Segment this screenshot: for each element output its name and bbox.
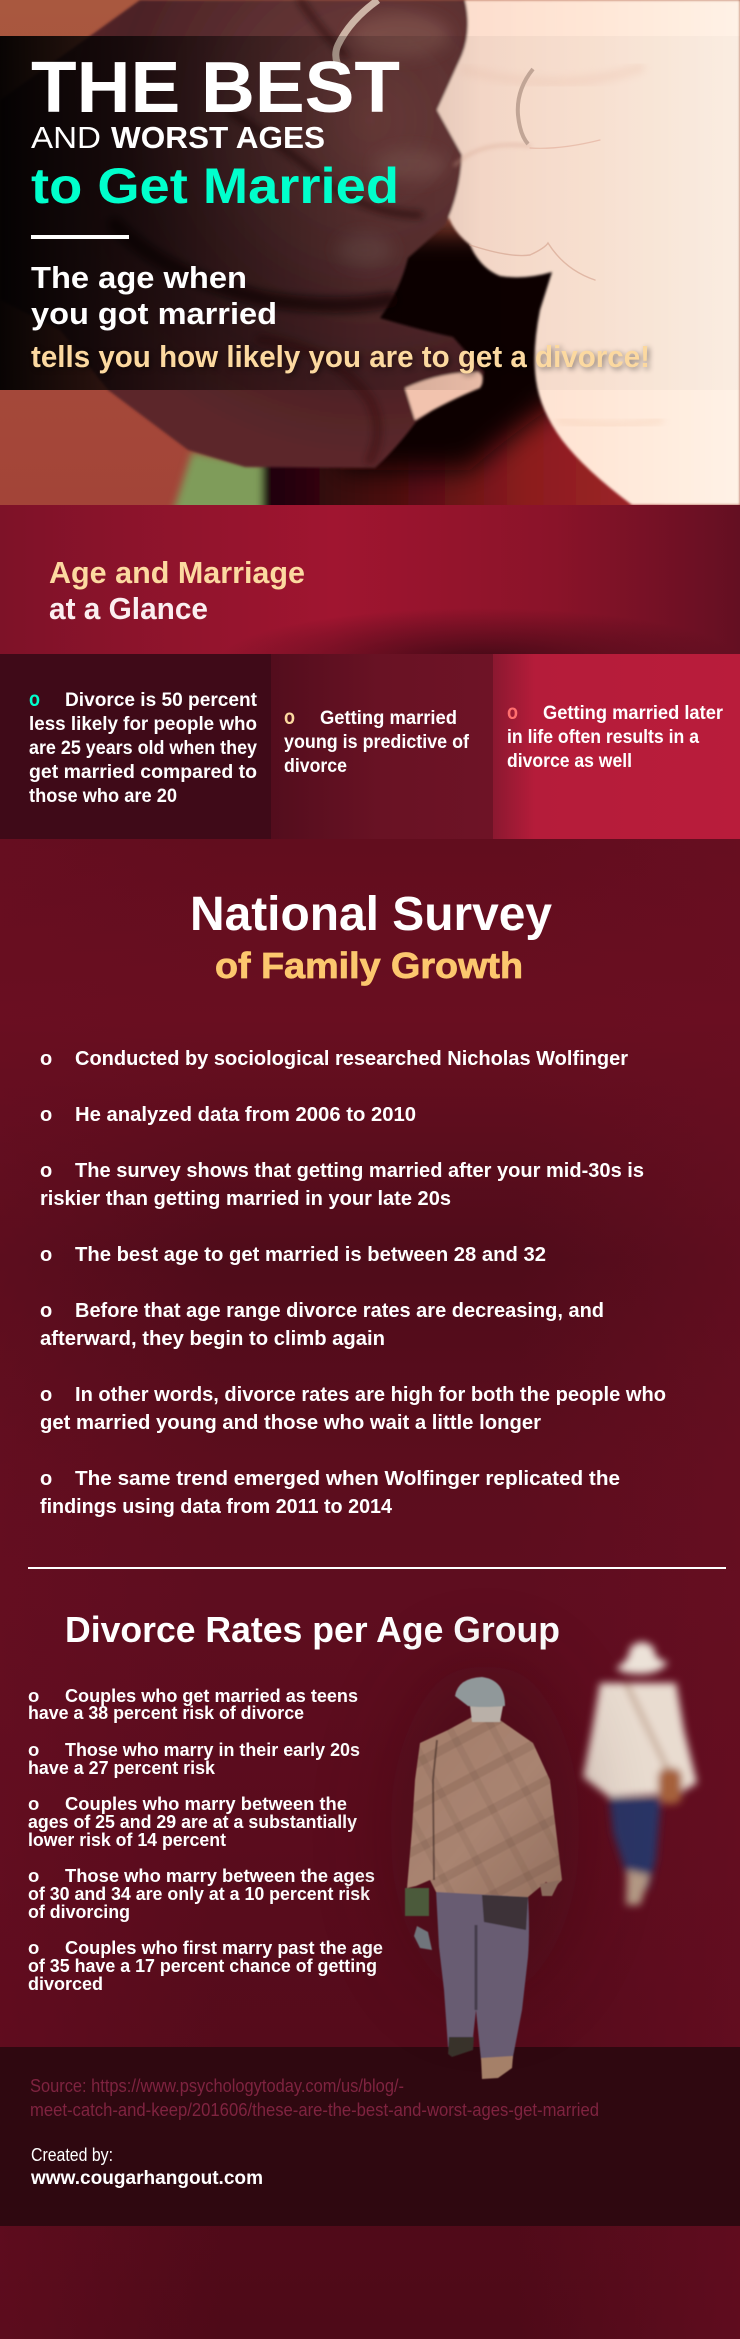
panel: divorce is 50 percent less likely: those who are 20 bbox=[29, 786, 177, 807]
panel: divorce is 50 percent less likely: are 25 years old when they bbox=[29, 738, 257, 759]
icon: pale hand ring bbox=[518, 69, 533, 144]
title: THE BEST bbox=[31, 48, 400, 128]
list: divorce rates: Couples who get married as teens bbox=[65, 1685, 358, 1706]
panel: getting married young: young is predictive of bbox=[284, 732, 470, 753]
panel: footer bbox=[0, 2047, 740, 2226]
heading: national survey bbox=[190, 888, 552, 986]
main background bbox=[0, 839, 740, 2339]
list: survey findings: In other words, divorce rates are high for both the people who bbox=[75, 1384, 666, 1406]
list: survey findings bbox=[40, 1048, 666, 1518]
panel: age and marriage header bbox=[0, 505, 740, 654]
title: to Get Married bbox=[31, 158, 399, 214]
heading: divorce rates per age group: Divorce Rates per Age Group bbox=[65, 1609, 560, 1650]
hero dark band bbox=[0, 36, 740, 390]
panel: getting married young: o bbox=[284, 706, 295, 729]
panel: getting married later: o bbox=[507, 701, 518, 724]
title: AND bbox=[31, 120, 101, 155]
panel: getting married later bbox=[493, 654, 740, 839]
list: divorce rates bbox=[28, 1685, 383, 1994]
credit: www.cougarhangout.com bbox=[30, 2168, 263, 2189]
panel: divorce is 50 percent less likely bbox=[0, 654, 271, 839]
list: survey findings: findings using data from 2011 to 2014 bbox=[40, 1496, 393, 1518]
panel: divorce is 50 percent less likely: Divorce is 50 percent bbox=[65, 690, 258, 711]
pale hand creases and shading bbox=[455, 68, 660, 425]
list: divorce rates: ages of 25 and 29 are at a substantially bbox=[28, 1811, 358, 1832]
heading: age and marriage: Age and Marriage bbox=[49, 555, 305, 590]
panel: divorce is 50 percent less likely: less likely for people who bbox=[29, 714, 257, 735]
heading: age and marriage: at a Glance bbox=[49, 591, 208, 626]
list: survey findings: o bbox=[40, 1300, 52, 1322]
list: divorce rates: Those who marry in their early 20s bbox=[65, 1739, 360, 1760]
dark hand creases and shading bbox=[115, 0, 420, 460]
icon: dark hand ring bbox=[336, 0, 378, 72]
subtitle: you got married bbox=[31, 296, 277, 331]
list: divorce rates: lower risk of 14 percent bbox=[28, 1829, 226, 1850]
list: divorce rates: of divorcing bbox=[28, 1901, 130, 1922]
list: survey findings: Before that age range divorce rates are decreasing, and bbox=[75, 1300, 604, 1322]
panel: divorce is 50 percent less likely: o bbox=[29, 688, 40, 711]
heading: national survey: National Survey bbox=[190, 888, 552, 941]
title: WORST AGES bbox=[111, 120, 325, 155]
subtitle: The age when bbox=[31, 260, 247, 295]
list: divorce rates: o bbox=[28, 1685, 39, 1706]
list: survey findings: o bbox=[40, 1384, 52, 1406]
list: survey findings: o bbox=[40, 1244, 52, 1266]
list: divorce rates: Couples who marry between the bbox=[65, 1793, 347, 1814]
list: survey findings: Conducted by sociological researched Nicholas Wolfinger bbox=[75, 1048, 628, 1070]
list: survey findings: riskier than getting married in your late 20s bbox=[40, 1188, 451, 1210]
panel: getting married later: Getting married later bbox=[543, 703, 724, 724]
list: divorce rates: o bbox=[28, 1937, 39, 1958]
list: survey findings: o bbox=[40, 1160, 52, 1182]
list: divorce rates: Couples who first marry past the age bbox=[65, 1937, 383, 1958]
list: survey findings: o bbox=[40, 1104, 52, 1126]
heading: national survey: of Family Growth bbox=[215, 945, 523, 986]
source bbox=[30, 2076, 599, 2120]
panel: divorce is 50 percent less likely: get married compared to bbox=[29, 762, 257, 783]
list: divorce rates: of 35 have a 17 percent chance of getting bbox=[28, 1955, 377, 1976]
list: survey findings: He analyzed data from 2006 to 2010 bbox=[75, 1104, 416, 1126]
list: divorce rates: o bbox=[28, 1793, 39, 1814]
list: divorce rates: have a 38 percent risk of divorce bbox=[28, 1702, 304, 1723]
subtitle bbox=[31, 260, 650, 374]
panel: getting married young bbox=[271, 654, 493, 839]
list: survey findings: afterward, they begin to climb again bbox=[40, 1328, 385, 1350]
panel: getting married later: divorce as well bbox=[507, 751, 632, 772]
hero photo: two hands with wedding rings bbox=[0, 0, 740, 525]
list: survey findings: o bbox=[40, 1468, 52, 1490]
list: survey findings: The best age to get married is between 28 and 32 bbox=[75, 1244, 546, 1266]
title bbox=[31, 48, 400, 214]
panel: getting married young: Getting married bbox=[320, 708, 457, 729]
credit: Created by: bbox=[31, 2145, 113, 2165]
list: divorce rates: have a 27 percent risk bbox=[28, 1757, 216, 1778]
source: meet-catch-and-keep/201606/these-are-the-best-and-worst-ages-get-married bbox=[30, 2100, 599, 2120]
list: survey findings: The same trend emerged when Wolfinger replicated the bbox=[75, 1468, 620, 1490]
credit bbox=[30, 2145, 263, 2189]
list: survey findings: The survey shows that getting married after your mid-30s is bbox=[75, 1160, 644, 1182]
list: divorce rates: o bbox=[28, 1865, 39, 1886]
list: survey findings: get married young and those who wait a little longer bbox=[40, 1412, 541, 1434]
list: divorce rates: Those who marry between the ages bbox=[65, 1865, 375, 1886]
source: Source: https://www.psychologytoday.com/us/blog/- bbox=[30, 2076, 404, 2096]
hero rule bbox=[31, 235, 129, 239]
panel: getting married young: divorce bbox=[284, 756, 347, 777]
list: divorce rates: o bbox=[28, 1739, 39, 1760]
list: survey findings: o bbox=[40, 1048, 52, 1070]
list: divorce rates: of 30 and 34 are only at a 10 percent risk bbox=[28, 1883, 371, 1904]
list: divorce rates: divorced bbox=[28, 1973, 103, 1994]
panel: getting married later: in life often results in a bbox=[507, 727, 699, 748]
photo: elderly man walking away bbox=[390, 1660, 580, 2079]
heading: age and marriage bbox=[49, 555, 305, 626]
subtitle: tells you how likely you are to get a divorce! bbox=[31, 339, 650, 374]
photo: blurred woman walking away bbox=[583, 1642, 697, 1905]
